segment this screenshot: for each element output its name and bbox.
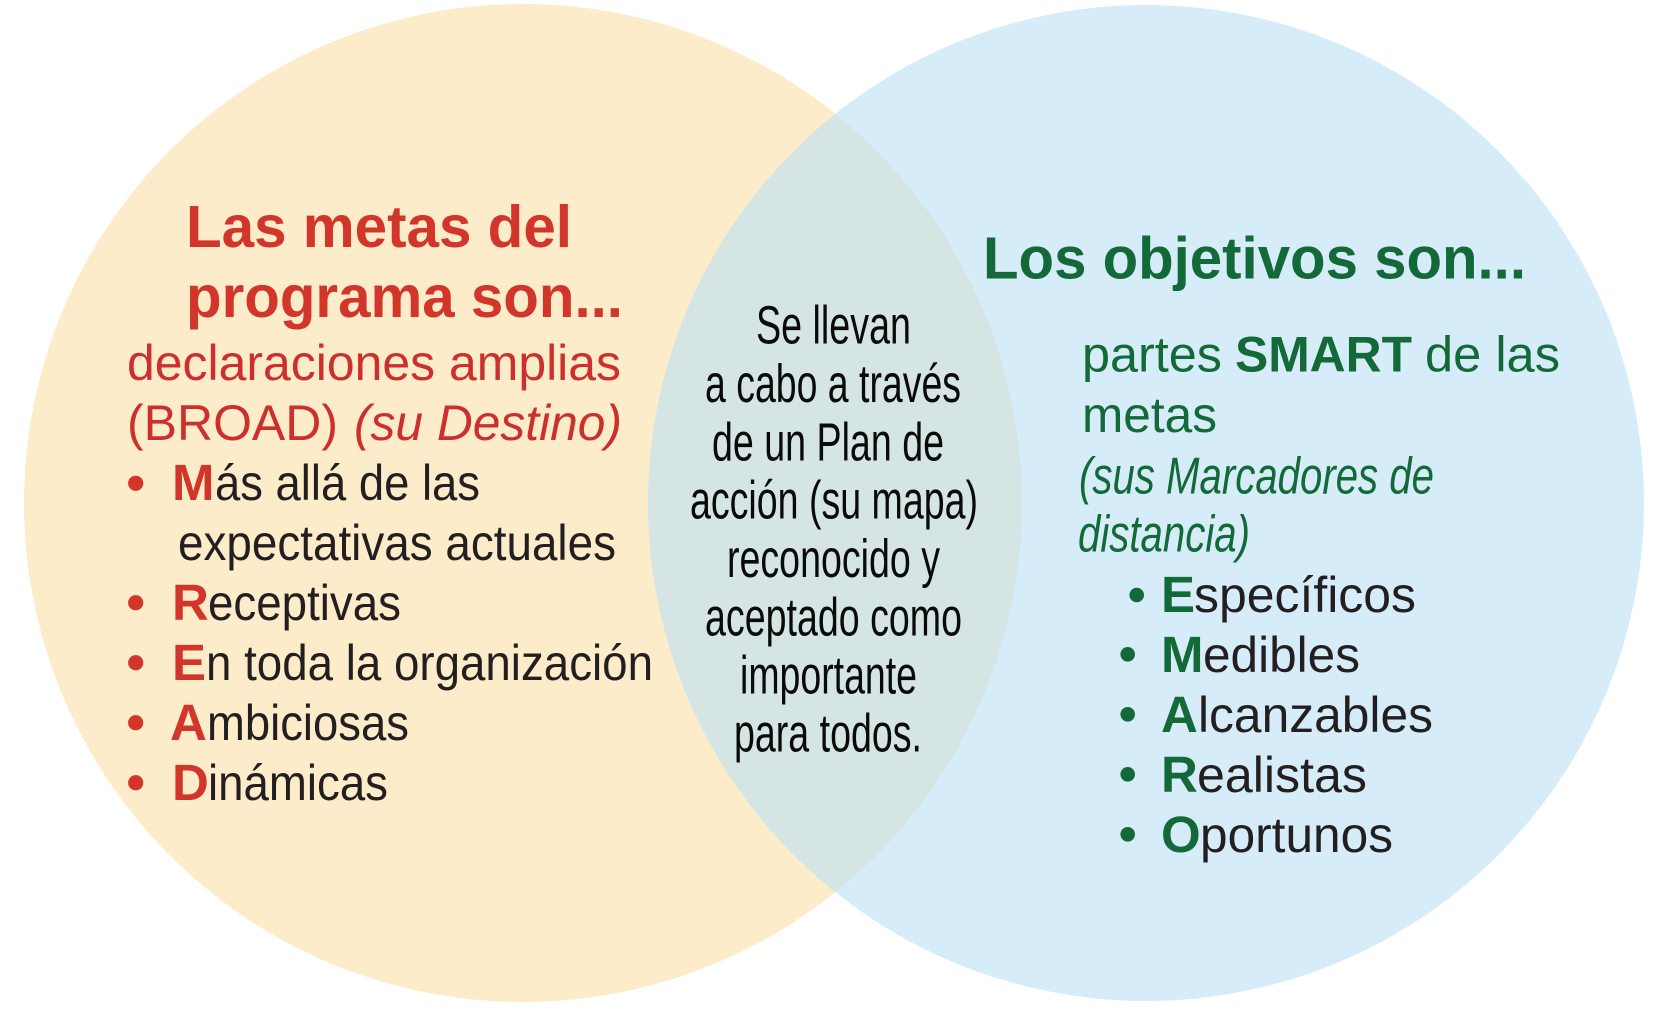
right circle: objectives [648, 5, 1644, 1001]
item: A: mbiciosas [207, 695, 409, 751]
objectives description: de las [1425, 326, 1560, 382]
item: M: edibles [1203, 627, 1360, 683]
objectives description [1082, 326, 1560, 443]
panel: shared text: acción (su mapa) [690, 470, 978, 530]
item: M [128, 454, 616, 571]
item: A: A [170, 694, 207, 751]
item: A [128, 694, 409, 751]
panel: shared text: a cabo a través [705, 354, 961, 414]
item: M: ás allá de las [215, 455, 480, 511]
item: R [1120, 746, 1367, 803]
item: R [128, 574, 401, 631]
panel: shared text: Se llevan [756, 296, 911, 356]
item: O: O [1161, 806, 1201, 863]
objectives note: distancia) [1078, 506, 1250, 564]
item: O [1120, 806, 1393, 863]
list: BROAD goals [128, 454, 653, 811]
panel: goals text [127, 194, 653, 811]
item: M: M [1161, 626, 1203, 683]
heading: objectives: Los objetivos son... [983, 225, 1526, 291]
goals description: (su Destino) [354, 395, 622, 451]
panel: shared text: reconocido y [727, 529, 940, 589]
goals description: declaraciones amplias [127, 335, 621, 391]
item: D: D [172, 754, 209, 811]
item: E: n toda la organización [206, 635, 653, 691]
panel: shared text: de un Plan de [712, 412, 944, 472]
item: R: ealistas [1197, 747, 1367, 803]
panel: shared text [690, 296, 978, 764]
objectives note: (sus Marcadores de [1079, 447, 1434, 505]
item: E: specíficos [1194, 567, 1416, 623]
objectives description: metas [1082, 387, 1217, 443]
item: A: lcanzables [1198, 687, 1433, 743]
item: E: E [1161, 566, 1195, 623]
panel: shared text: aceptado como [705, 588, 962, 648]
item: R: R [1161, 746, 1198, 803]
item: R: eceptivas [208, 575, 401, 631]
left circle: program goals [24, 4, 1022, 1002]
heading: goals [186, 194, 623, 330]
panel: shared text: para todos. [734, 704, 922, 764]
goals description [127, 335, 622, 451]
item: O: portunos [1200, 807, 1393, 863]
objectives description: partes [1082, 326, 1222, 382]
heading: goals: programa son... [186, 264, 623, 330]
list: SMART objectives [1120, 566, 1433, 863]
overlap area [648, 114, 1022, 892]
item: E: E [172, 634, 206, 691]
objectives note [1078, 447, 1434, 564]
heading: goals: Las metas del [186, 194, 572, 260]
objectives description: SMART [1235, 326, 1412, 382]
goals description: (BROAD) [127, 395, 338, 451]
item: D [128, 754, 388, 811]
panel: shared text: importante [740, 646, 917, 706]
item: M [1120, 626, 1360, 683]
item: D: inámicas [208, 755, 388, 811]
item: A: A [1161, 686, 1198, 743]
item: M: M [172, 454, 214, 511]
panel: objectives text [983, 225, 1560, 863]
item: M: expectativas actuales [178, 515, 616, 571]
item: R: R [172, 574, 209, 631]
